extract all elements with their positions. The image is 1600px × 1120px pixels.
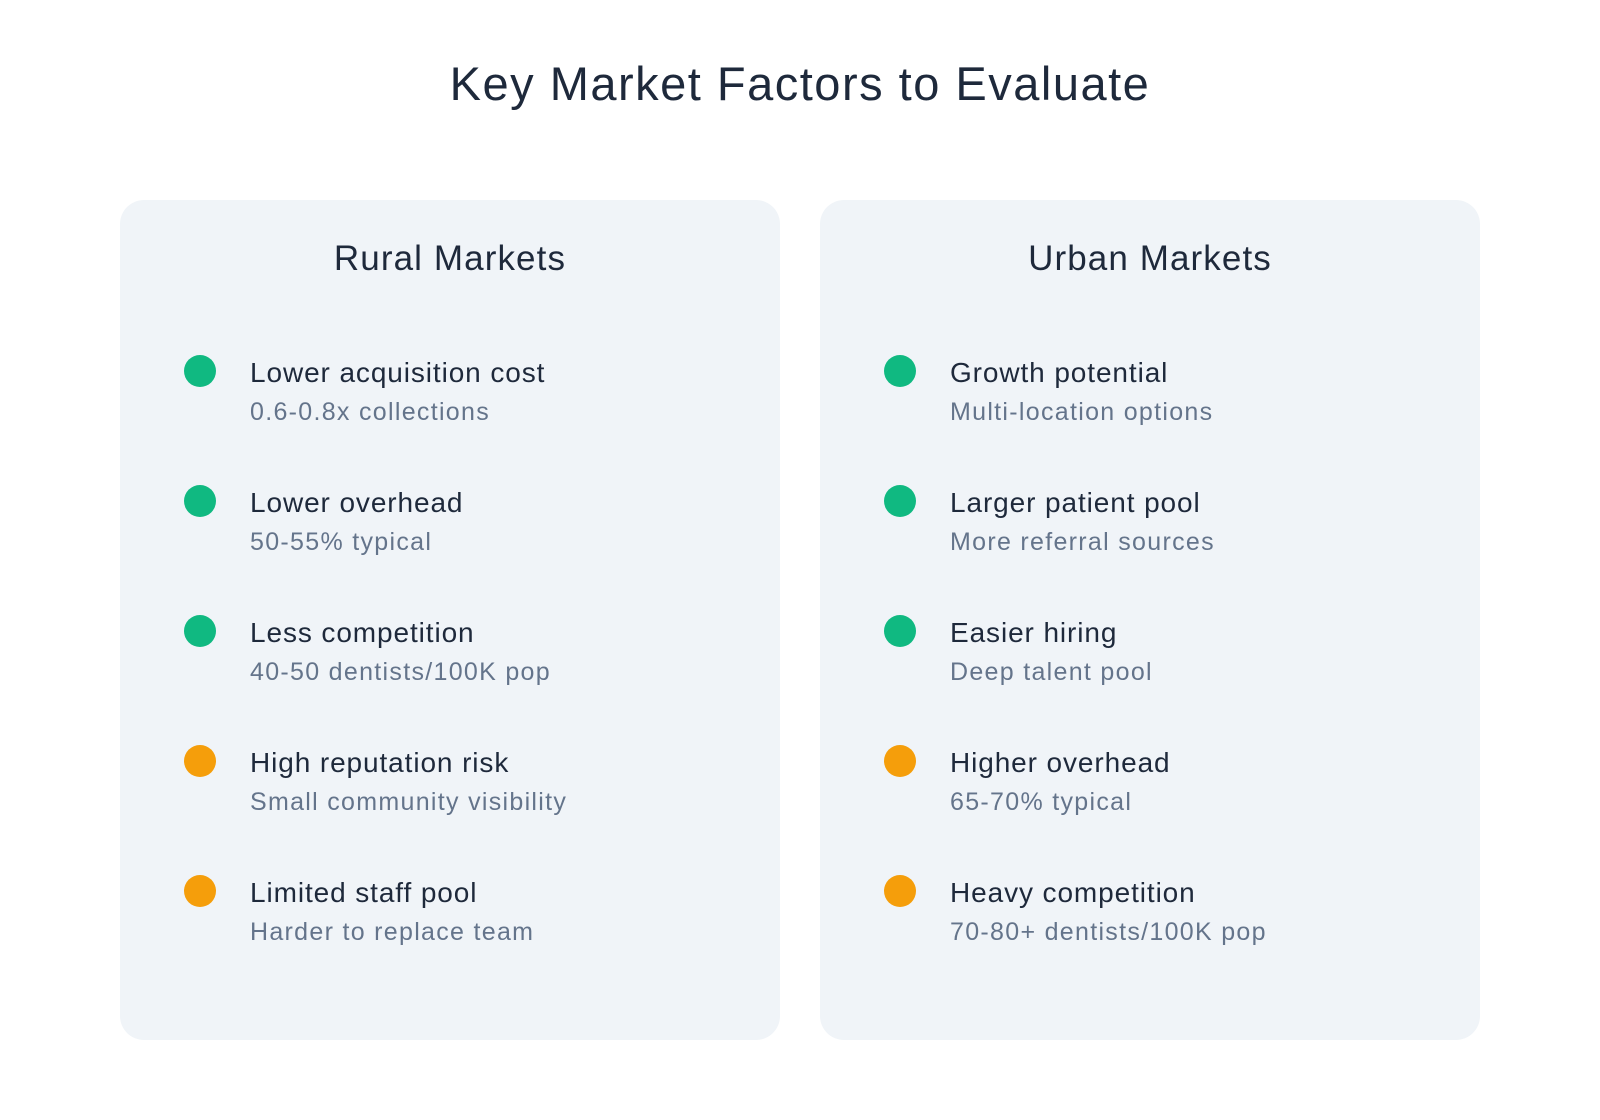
panel: urban [820, 200, 1480, 1040]
item: growth: Multi-location options [950, 398, 1213, 426]
item: competition: 40-50 dentists/100K pop [250, 658, 551, 686]
panel: rural [120, 200, 780, 1040]
item: growth [884, 355, 1213, 426]
item: competition: Heavy competition [950, 877, 1196, 908]
item: reputation: Small community visibility [250, 788, 567, 816]
item: overhead: 50-55% typical [250, 528, 432, 556]
heading: urban: Urban Markets [1028, 239, 1272, 278]
item: competition: 70-80+ dentists/100K pop [950, 918, 1267, 946]
item: overhead [884, 745, 1171, 816]
item: staff: Limited staff pool [250, 877, 477, 908]
heading: rural: Rural Markets [334, 239, 566, 278]
item: hiring: Easier hiring [950, 617, 1117, 648]
item: staff [184, 875, 534, 946]
item: overhead: 65-70% typical [950, 788, 1132, 816]
item: reputation: High reputation risk [250, 747, 509, 778]
item: acquisition: Lower acquisition cost [250, 357, 545, 388]
item: reputation [184, 745, 567, 816]
title: Key Market Factors to Evaluate [450, 57, 1150, 110]
item: patient pool [884, 485, 1215, 556]
item: competition [884, 875, 1267, 946]
item: hiring [884, 615, 1153, 686]
item: staff: Harder to replace team [250, 918, 534, 946]
item: competition: Less competition [250, 617, 475, 648]
item: acquisition [184, 355, 545, 426]
item: patient pool: Larger patient pool [950, 487, 1201, 518]
item: growth: Growth potential [950, 357, 1168, 388]
item: overhead: Lower overhead [250, 487, 463, 518]
item: acquisition: 0.6-0.8x collections [250, 398, 490, 426]
item: overhead: Higher overhead [950, 747, 1171, 778]
item: overhead [184, 485, 463, 556]
item: patient pool: More referral sources [950, 528, 1215, 556]
item: hiring: Deep talent pool [950, 658, 1153, 686]
item: competition [184, 615, 551, 686]
